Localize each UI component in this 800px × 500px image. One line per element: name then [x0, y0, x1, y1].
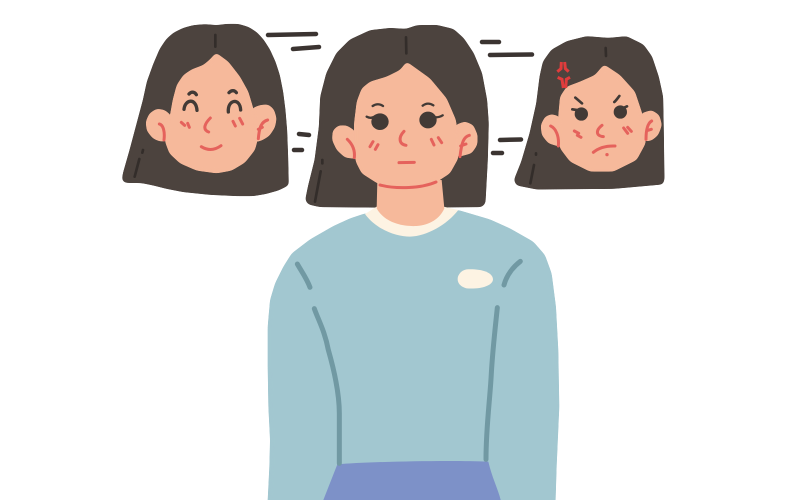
- hair: central figure: [306, 25, 488, 207]
- head: laughing face: [122, 24, 288, 196]
- sweater collar: [365, 207, 458, 237]
- sweater seams: [297, 261, 520, 463]
- sweater badge: [458, 269, 493, 289]
- head: angry face: [514, 37, 664, 189]
- skirt: [323, 461, 501, 500]
- body: blue sweater: [267, 207, 559, 500]
- head: neutral central face: [315, 37, 478, 226]
- icon: anger mark: [557, 62, 570, 88]
- motion dashes: [268, 34, 532, 153]
